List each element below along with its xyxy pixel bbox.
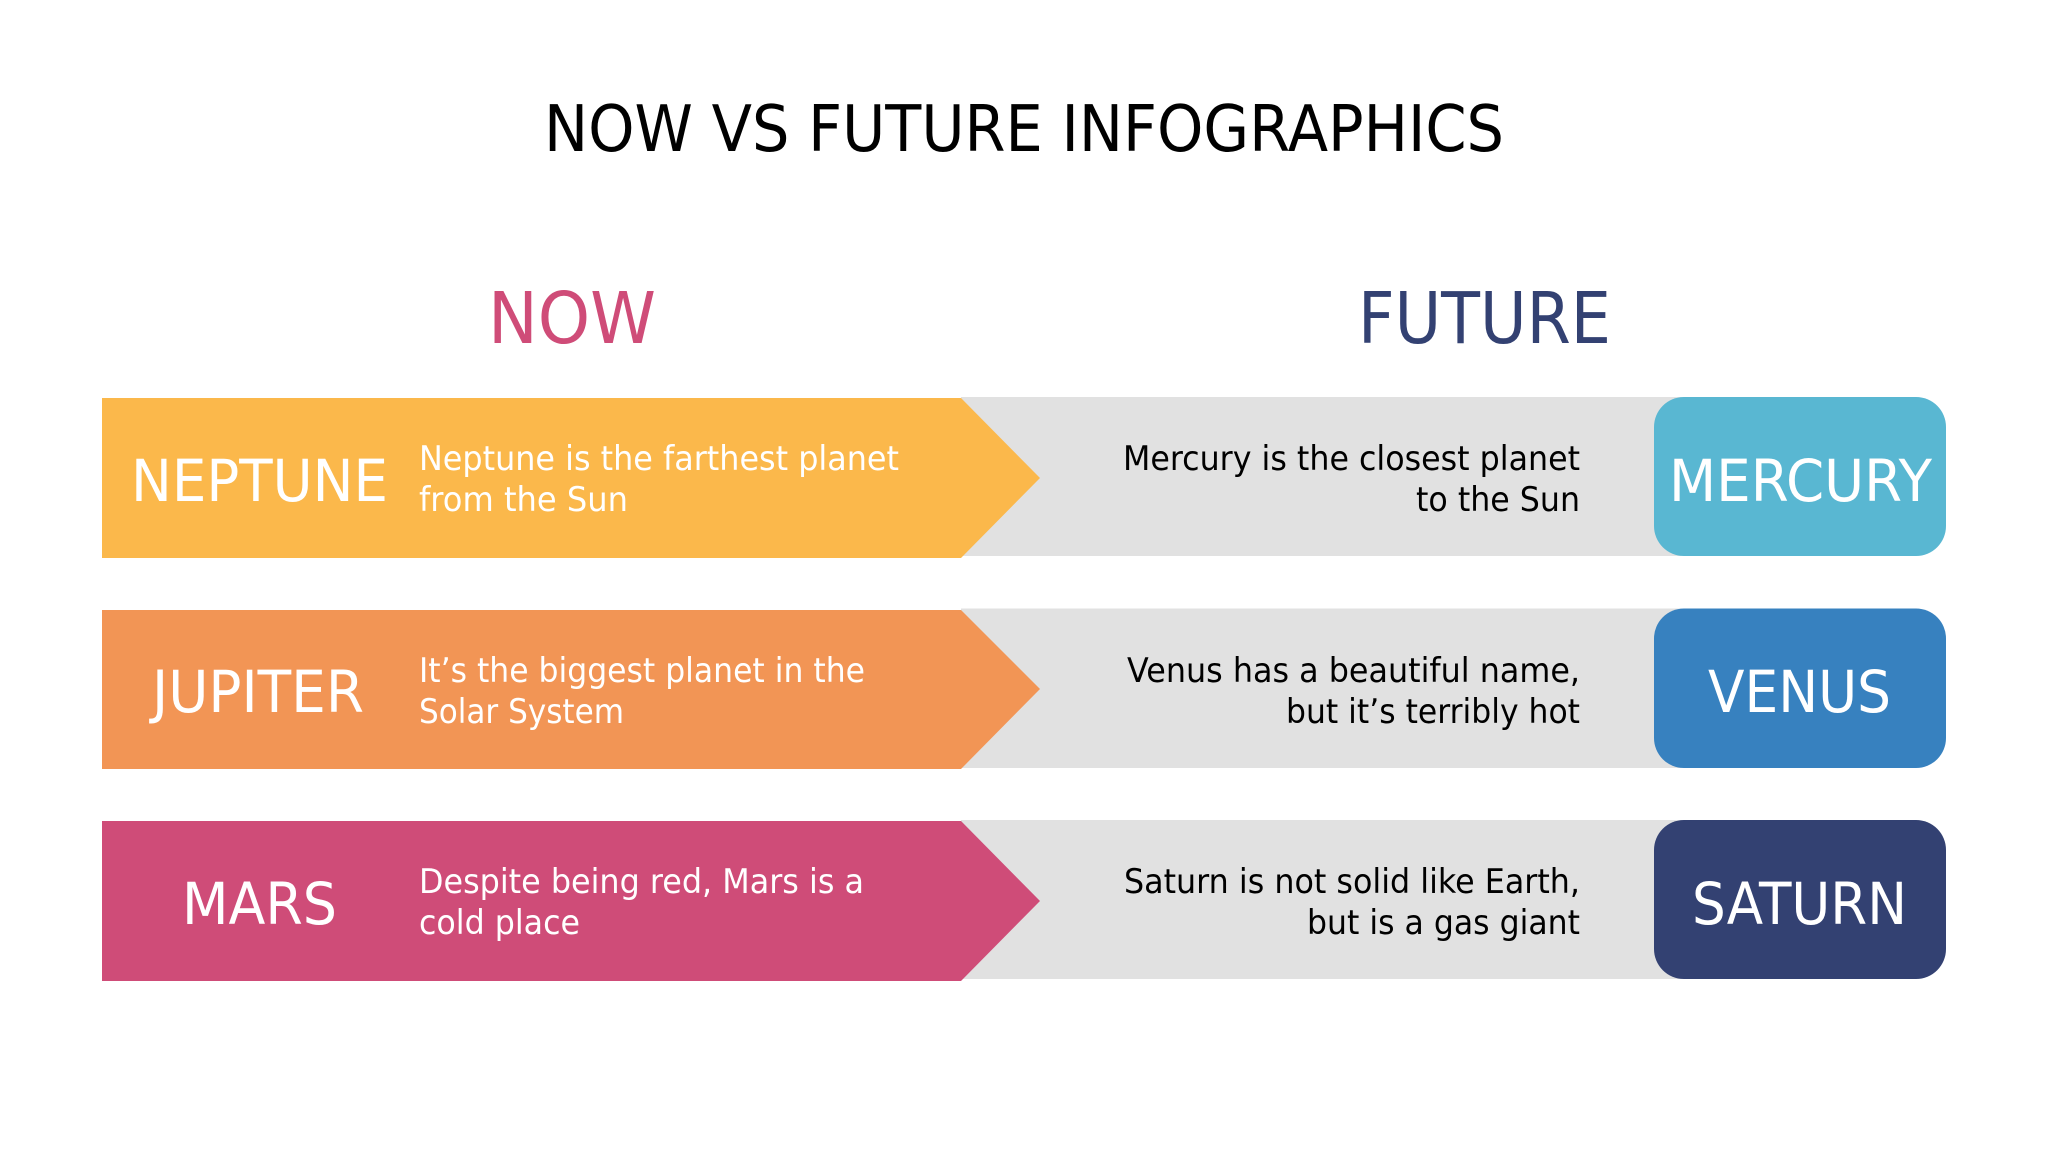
now label: NEPTUNE xyxy=(131,447,388,515)
future box xyxy=(1654,397,1946,556)
future description: Mercury is the closest planet xyxy=(1123,439,1580,479)
future label: VENUS xyxy=(1708,658,1891,726)
future band xyxy=(961,608,1681,768)
future box xyxy=(1654,608,1946,768)
future label: SATURN xyxy=(1692,870,1907,938)
now arrow xyxy=(102,610,1040,769)
future description: but it’s terribly hot xyxy=(1286,692,1580,732)
future description: to the Sun xyxy=(1416,480,1580,520)
row 3: mars to saturn xyxy=(102,820,1946,981)
now description: It’s the biggest planet in the xyxy=(419,651,865,691)
heading: now: NOW xyxy=(488,277,656,360)
now description: Neptune is the farthest planet xyxy=(419,439,899,479)
row 2: jupiter to venus xyxy=(102,608,1946,769)
now description: cold place xyxy=(419,903,580,943)
now label: JUPITER xyxy=(149,658,364,726)
now description: Despite being red, Mars is a xyxy=(419,862,864,902)
future box xyxy=(1654,820,1946,979)
heading: future: FUTURE xyxy=(1358,277,1611,360)
future band xyxy=(961,397,1681,556)
row 1: neptune to mercury xyxy=(102,397,1946,558)
future description: Venus has a beautiful name, xyxy=(1127,651,1580,691)
title: NOW VS FUTURE INFOGRAPHICS xyxy=(544,93,1504,167)
future description: but is a gas giant xyxy=(1307,903,1580,943)
now arrow xyxy=(102,821,1040,981)
now description: from the Sun xyxy=(419,480,628,520)
future band xyxy=(961,820,1681,979)
now label: MARS xyxy=(182,870,337,938)
now description: Solar System xyxy=(419,692,624,732)
future label: MERCURY xyxy=(1669,447,1933,515)
future description: Saturn is not solid like Earth, xyxy=(1124,862,1580,902)
now arrow xyxy=(102,398,1040,558)
